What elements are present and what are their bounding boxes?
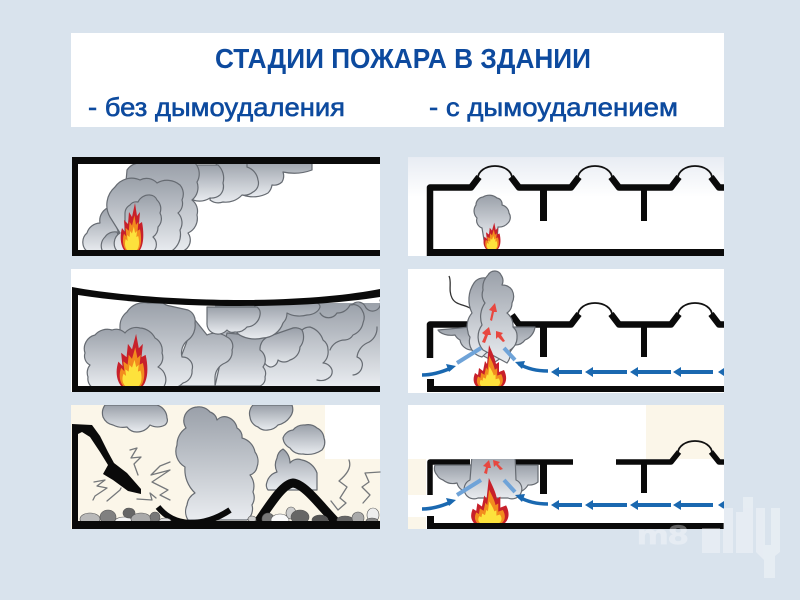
red hot-gas arrows (483, 460, 503, 474)
panel: stage 1 without smoke removal (72, 157, 380, 256)
watermark mark city (702, 497, 780, 578)
partitions and floor (427, 460, 724, 529)
heat zigzag lines (93, 448, 380, 510)
collapsed roof and debris (72, 424, 141, 522)
rubble (80, 507, 379, 526)
escaping smoke line (449, 276, 473, 310)
smoke clouds stage 3 (102, 405, 325, 520)
panel: stage 3 with smoke removal (408, 405, 724, 529)
smoke cloud stage 2 (84, 300, 381, 389)
burned roof segments (430, 452, 724, 495)
interior partitions and floor (427, 324, 724, 392)
smoke puff (474, 195, 510, 240)
interior partitions and floor (427, 187, 724, 256)
flame (121, 203, 143, 250)
smoke column through roof (438, 271, 535, 363)
blue air-flow arrows (422, 361, 724, 377)
roof with domes (430, 177, 724, 256)
watermark logo (637, 497, 780, 578)
panel: stage 1 with smoke removal (408, 157, 724, 256)
subtitle: with smoke removal: - с дымоудалением (429, 92, 678, 122)
watermark text m8: m8 (637, 520, 688, 550)
flame (484, 223, 500, 249)
smoke under roof (434, 455, 538, 499)
flame (471, 478, 509, 523)
panel: stage 2 without smoke removal (71, 269, 381, 392)
roof with domes (430, 314, 724, 358)
building outline (72, 157, 380, 256)
flame (474, 345, 506, 386)
subtitle: without smoke removal: - без дымоудаления (88, 92, 345, 122)
floor (72, 521, 380, 529)
light blue inflow arrows (457, 480, 515, 495)
smoke cloud stage 1 (83, 160, 312, 252)
light blue inflow arrows (457, 348, 515, 363)
red hot-gas arrows (482, 303, 505, 343)
header panel (71, 33, 724, 127)
panel: stage 2 with smoke removal (408, 269, 724, 393)
title: СТАДИИ ПОЖАРА В ЗДАНИИ (215, 43, 591, 74)
sagging roof and walls (72, 287, 380, 392)
blue air-flow arrows (422, 494, 724, 510)
flame (117, 334, 147, 386)
panel: stage 3 without smoke removal (71, 405, 380, 529)
